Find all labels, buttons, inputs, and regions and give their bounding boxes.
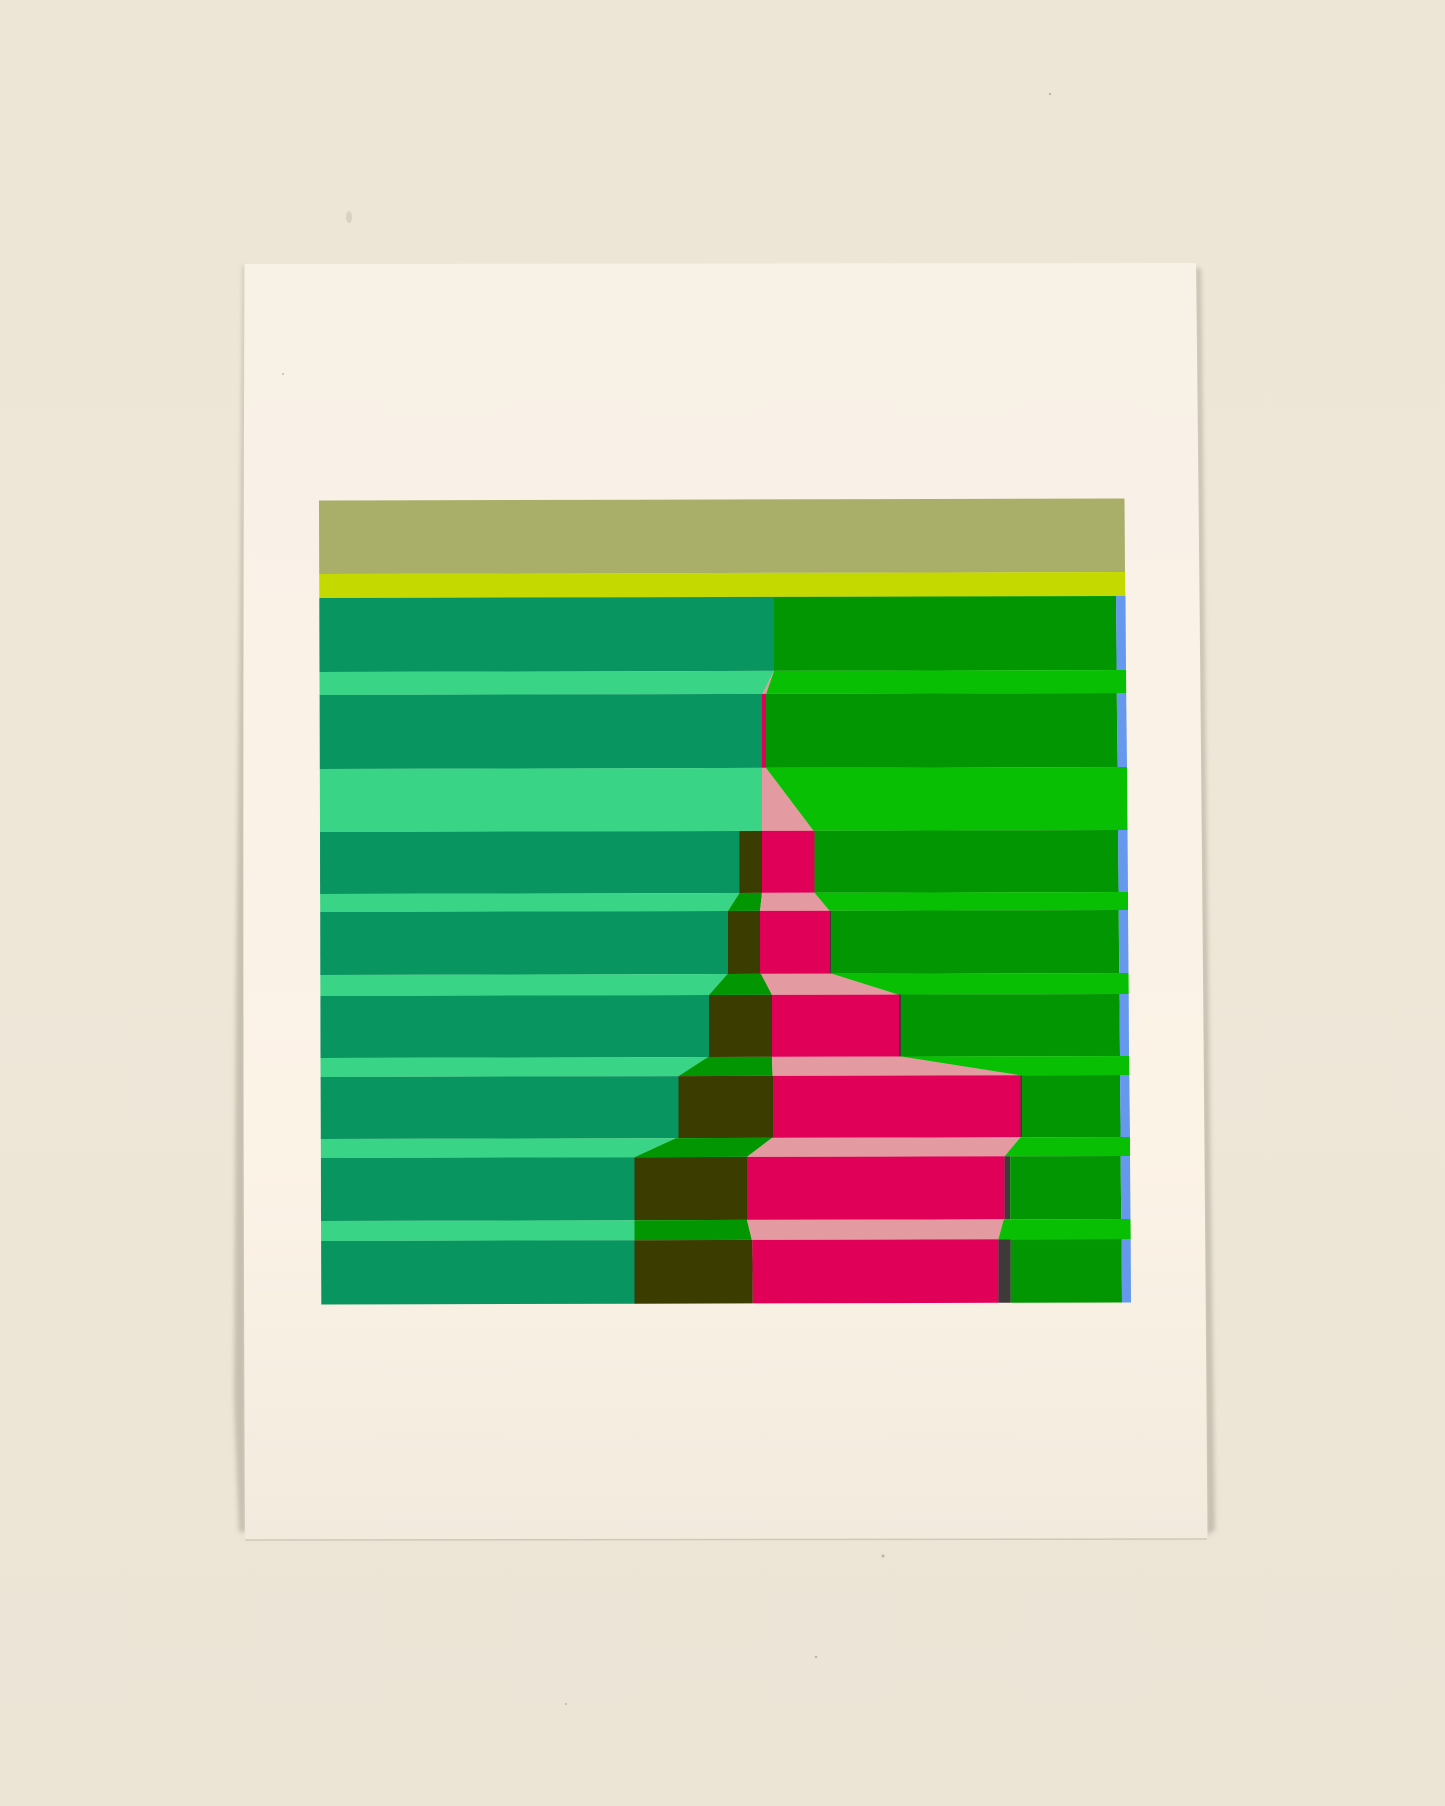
dust specks on wall bbox=[282, 93, 1051, 1705]
row 15 bbox=[321, 1239, 1131, 1304]
row 1 bbox=[319, 596, 1126, 672]
yellow band bbox=[319, 572, 1125, 598]
row 3 bbox=[320, 693, 1127, 769]
white paper sheet bbox=[243, 263, 1207, 1540]
row 13 bbox=[321, 1156, 1130, 1221]
row 10 light bbox=[320, 1056, 1129, 1077]
row 14 light bbox=[321, 1219, 1131, 1241]
row 12 light bbox=[321, 1137, 1130, 1158]
row 5 bbox=[320, 830, 1128, 894]
row 7 bbox=[320, 910, 1128, 975]
print colour field bbox=[319, 498, 1131, 1305]
row 11 bbox=[321, 1075, 1130, 1139]
olive top band bbox=[319, 498, 1125, 574]
paper shadows bbox=[234, 266, 1215, 1536]
row 2 light bbox=[320, 670, 1126, 695]
row 6 light bbox=[320, 892, 1128, 912]
row 9 bbox=[320, 994, 1129, 1058]
row 8 light bbox=[320, 973, 1129, 996]
paper bottom edge bbox=[245, 1539, 1207, 1540]
row 4 light bbox=[320, 767, 1128, 832]
